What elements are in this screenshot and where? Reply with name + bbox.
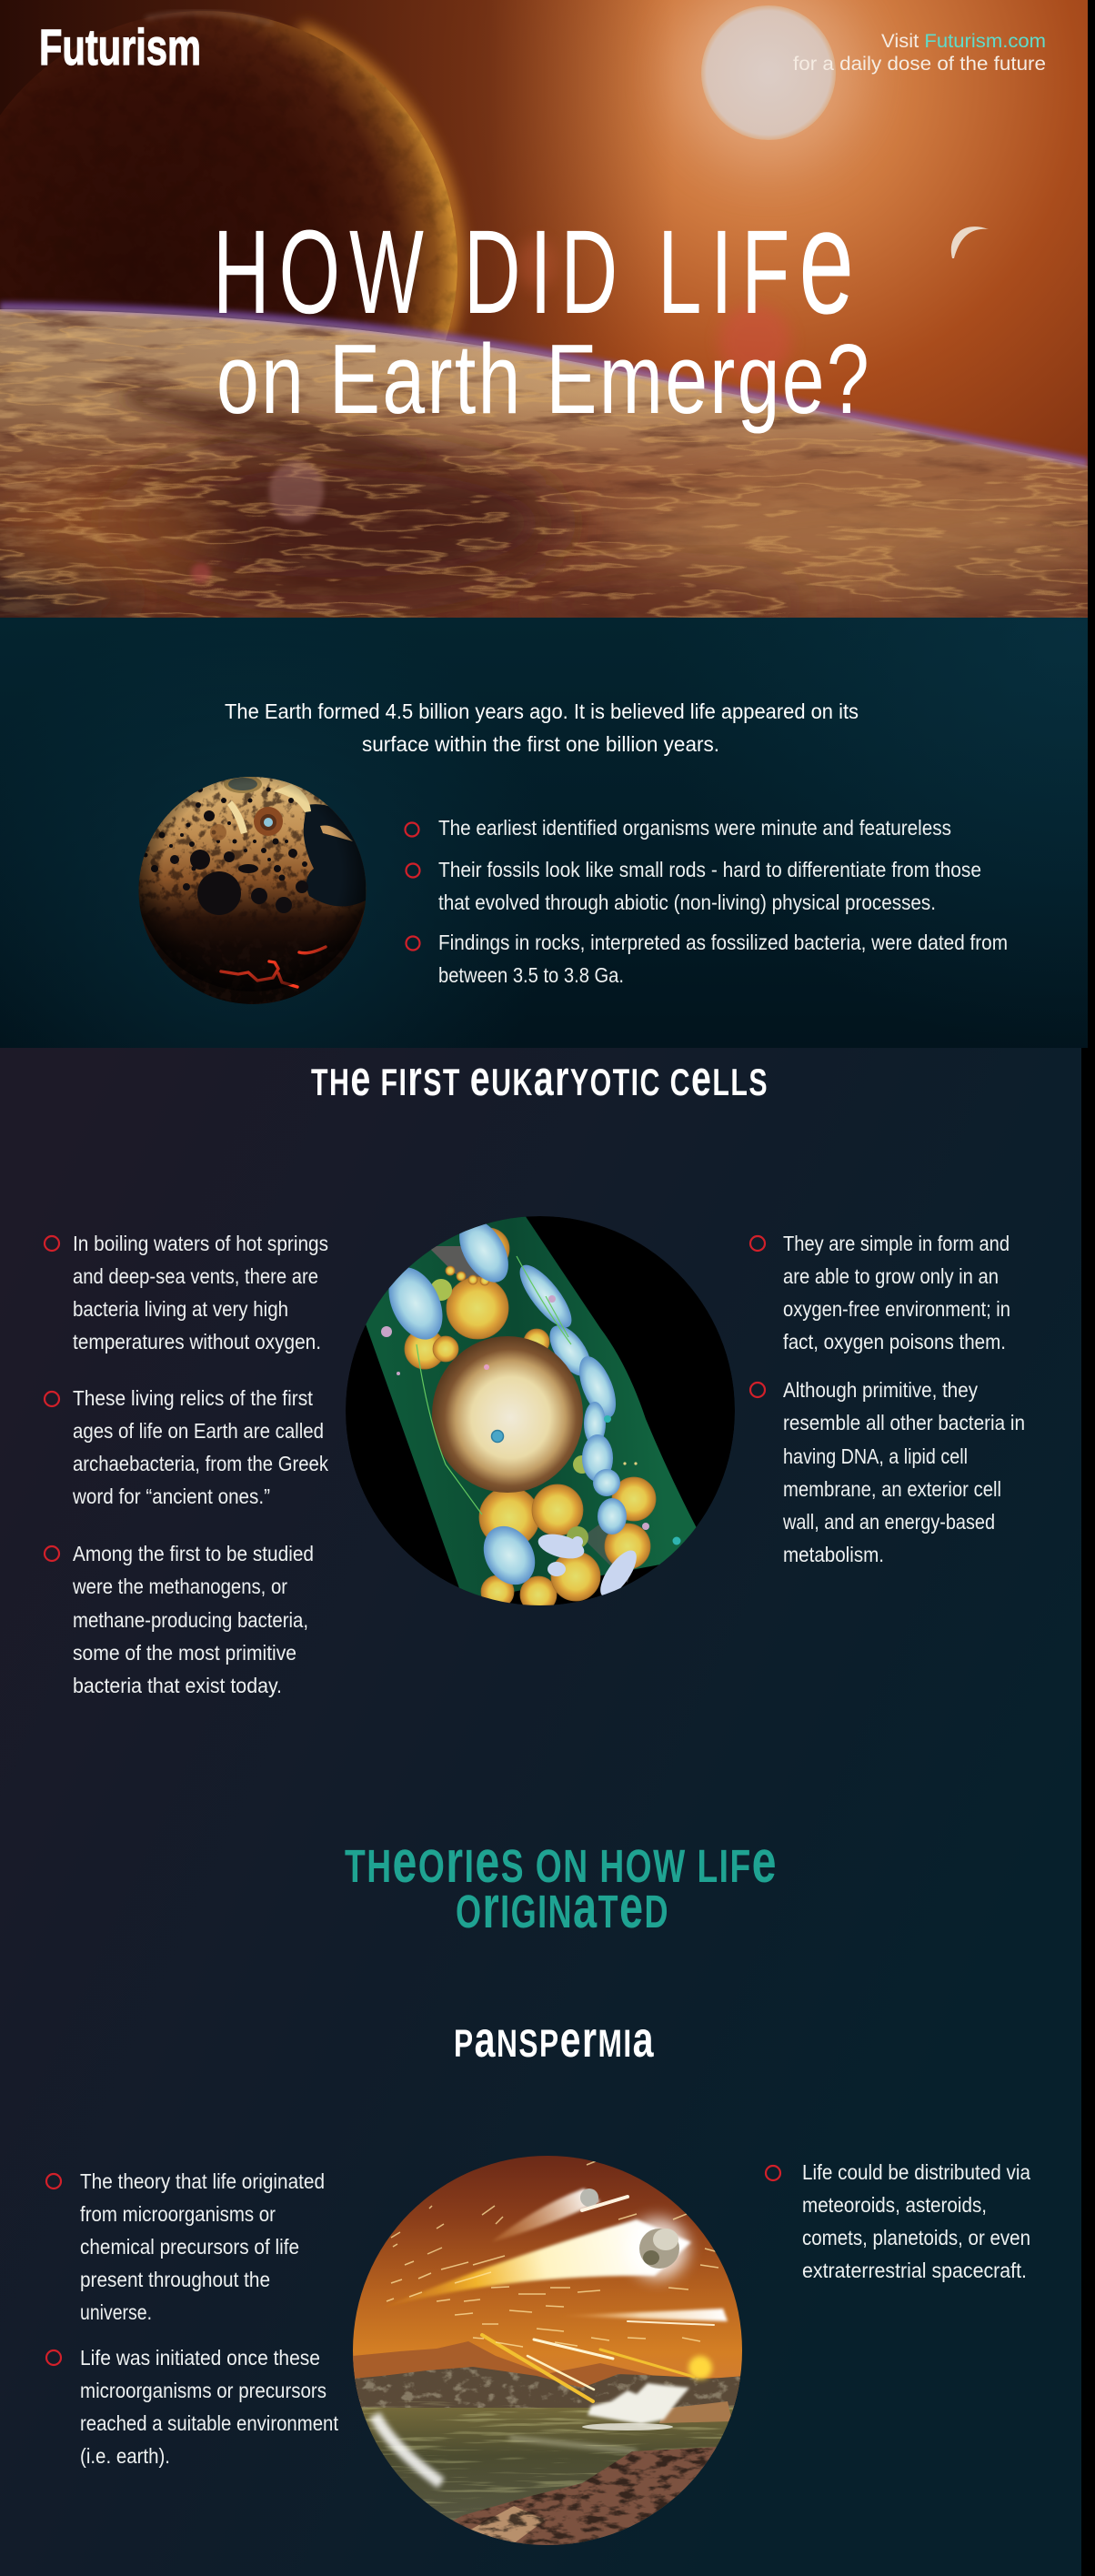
bullet: DNA and membrane: metabolism. <box>783 1543 884 1566</box>
bullet: archaebacteria <box>45 1386 328 1508</box>
bullet 1: The earliest identified organisms were minute and featureless <box>438 816 951 840</box>
bullet: methanogens: bacteria that exist today. <box>73 1674 282 1697</box>
right column: panspermia distribution: extraterrestrial spacecraft. <box>802 2259 1027 2282</box>
bullet: life initiated: reached a suitable environment <box>80 2411 339 2435</box>
bullet: hot springs: and deep-sea vents, there are <box>73 1264 318 1288</box>
lens flares <box>191 238 791 583</box>
bullet: theory: from microorganisms or <box>80 2202 276 2226</box>
bullet: life initiated: (i.e. earth). <box>80 2444 170 2468</box>
bullet: archaebacteria: ages of life on Earth are called <box>73 1419 324 1443</box>
bullet: oxygen-free: fact, oxygen poisons them. <box>783 1330 1006 1353</box>
bullet: oxygen-free <box>750 1232 1010 1353</box>
bullet: hot springs: In boiling waters of hot springs <box>73 1232 328 1255</box>
bullet: oxygen-free: oxygen-free environment; in <box>783 1297 1010 1321</box>
bullet: hot springs: bacteria living at very high <box>73 1297 288 1321</box>
bullet 3: Findings in rocks, interpreted as fossilized bacteria, were dated from <box>438 931 1008 954</box>
bullet: theory: universe. <box>80 2300 152 2324</box>
tagline: Visit Futurism.com <box>881 31 1046 52</box>
logo: Futurism <box>39 18 201 75</box>
tagline <box>793 31 1046 75</box>
lake water <box>362 2401 734 2544</box>
shore <box>659 2401 732 2423</box>
right column: panspermia distribution <box>766 2160 1030 2282</box>
bullet 2: that evolved through abiotic (non-living) physical processes. <box>438 891 936 914</box>
illustration: meteor impacts <box>346 2156 755 2556</box>
bullet list: earliest organisms <box>406 816 1008 987</box>
heading: theories on how life originated: OrIGINaTeD <box>456 1874 669 1941</box>
bullet: methanogens: Among the first to be studied <box>73 1542 314 1565</box>
heading: theories on how life originated <box>345 1828 778 1941</box>
bullet: hot springs: temperatures without oxygen. <box>73 1330 321 1353</box>
earth surface with clouds <box>0 309 1088 618</box>
bullet: DNA and membrane: resemble all other bacteria in <box>783 1411 1025 1434</box>
bullet 2: Their fossils look like small rods - hard to differentiate from those <box>438 858 981 881</box>
bullet: methanogens: some of the most primitive <box>73 1641 296 1665</box>
distant explosion <box>688 2356 712 2380</box>
atmosphere rim <box>0 306 1088 466</box>
tagline: for a daily dose of the future <box>793 54 1046 75</box>
bullet: methanogens <box>45 1542 314 1697</box>
heading: panspermia: PaNSPerMIa <box>454 2010 655 2068</box>
main title <box>213 177 871 435</box>
bullet: life initiated: microorganisms or precursors <box>80 2379 326 2402</box>
debris streaks <box>387 2161 718 2347</box>
bullet: DNA and membrane: Although primitive, they <box>783 1378 978 1402</box>
nucleus <box>432 1336 583 1493</box>
bullet: DNA and membrane: wall, and an energy-based <box>782 1510 995 1534</box>
bullet: oxygen-free: are able to grow only in an <box>783 1264 999 1288</box>
hero sky background <box>0 0 1088 466</box>
bullet: archaebacteria: word for “ancient ones.” <box>72 1484 270 1508</box>
intro text: surface within the first one billion years. <box>362 732 719 756</box>
right column: panspermia distribution: meteoroids, asteroids, <box>802 2193 987 2217</box>
heading: the first eukaryotic cells: THe FIrST eUKarYOTIC CeLLS <box>311 1051 769 1106</box>
bullet: theory: chemical precursors of life <box>80 2235 299 2259</box>
right column: panspermia distribution: Life could be distributed via <box>802 2160 1030 2184</box>
bullet: theory <box>46 2169 325 2324</box>
bullet: DNA and membrane: membrane, an exterior cell <box>783 1477 1001 1501</box>
large dark planet <box>0 9 470 341</box>
bullet: theory: present throughout the <box>80 2268 270 2291</box>
hero banner <box>0 0 1095 641</box>
bullet: theory: The theory that life originated <box>80 2169 325 2193</box>
meteors <box>382 2189 728 2401</box>
bullet 2 <box>406 858 981 914</box>
left column: bacteria facts <box>45 1232 328 1697</box>
small crescent moon <box>951 226 989 258</box>
icon: early earth planet <box>138 777 366 1004</box>
bullet: methanogens: were the methanogens, or <box>72 1575 287 1598</box>
blue organelles <box>378 1211 627 1594</box>
sun <box>681 0 856 160</box>
right column: panspermia distribution: comets, planetoids, or even <box>802 2226 1030 2249</box>
main title: on Earth Emerge? <box>216 324 871 435</box>
impact splash <box>582 2383 689 2430</box>
bullet: archaebacteria: These living relics of the first <box>73 1386 314 1410</box>
bullet: methanogens: methane-producing bacteria, <box>73 1608 308 1632</box>
illustration: cell cross-section <box>346 1210 735 1613</box>
bullet: life initiated <box>46 2346 339 2468</box>
intro text <box>225 699 859 756</box>
bullet: DNA and membrane: having DNA, a lipid cell <box>783 1444 968 1468</box>
panel: earth formation <box>0 618 1088 1048</box>
bullet: hot springs <box>45 1232 328 1353</box>
bullet 3: between 3.5 to 3.8 Ga. <box>438 963 624 987</box>
main title: HOW DID LIFe <box>213 177 863 345</box>
panel: eukaryotic cells and theories background <box>0 1048 1081 2576</box>
bullet 3 <box>406 931 1008 987</box>
bullet: DNA and membrane <box>750 1378 1025 1566</box>
foreground rocks <box>453 2447 717 2545</box>
bullet: archaebacteria: archaebacteria, from the Greek <box>73 1452 328 1475</box>
heading: theories on how life originated: THeOrIeS ON HOW LIFe <box>345 1828 778 1896</box>
bullet: life initiated: Life was initiated once these <box>80 2346 320 2370</box>
yellow organelles <box>405 1228 656 1613</box>
intro text: The Earth formed 4.5 billion years ago. It is believed life appeared on its <box>225 699 859 723</box>
bullet: oxygen-free: They are simple in form and <box>783 1232 1010 1255</box>
right column: bacteria traits <box>750 1232 1025 1566</box>
mountains <box>346 2341 755 2420</box>
left column: panspermia theory <box>46 2169 339 2468</box>
